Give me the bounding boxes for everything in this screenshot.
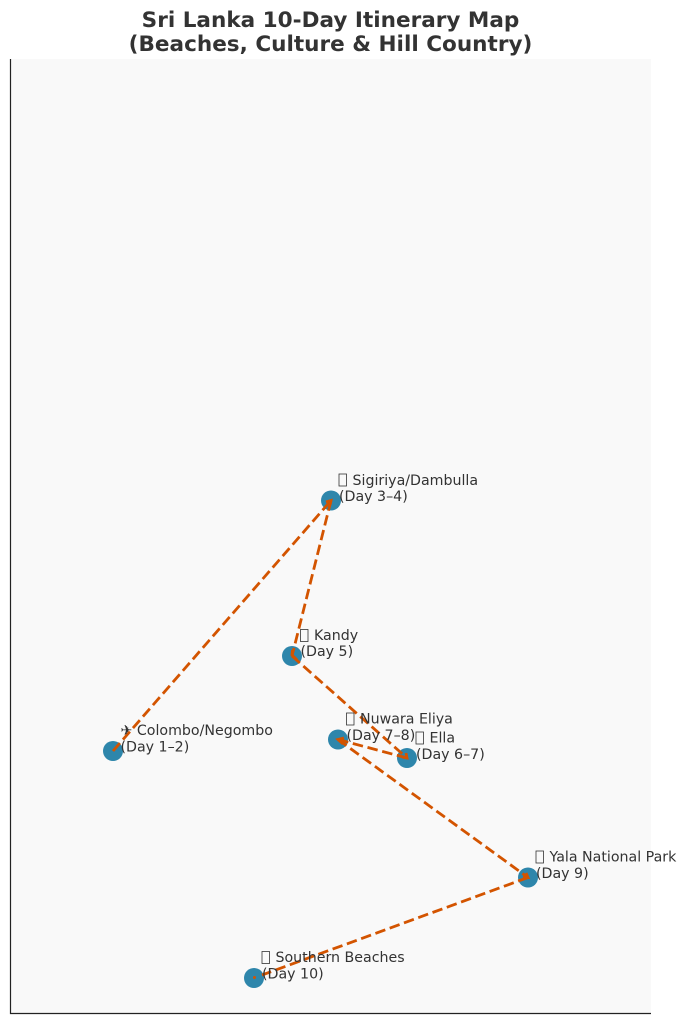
label: Yala National Park [536, 850, 677, 882]
label: Nuwara Eliya: Nuwara Eliya [360, 712, 453, 728]
title: (Beaches, Culture & Hill Country) [129, 32, 532, 57]
route arrow: Colombo to Sigiriya [113, 500, 331, 751]
label: Ella [416, 730, 485, 763]
label: Kandy [300, 628, 358, 660]
label: Colombo/Negombo: (Day 1–2) [120, 740, 189, 756]
label: Ella: Ella [430, 730, 455, 746]
label: Southern Beaches: Southern Beaches [276, 950, 405, 966]
label: Yala National Park: (Day 9) [536, 866, 589, 882]
route arrow: Kandy to Ella [292, 656, 407, 758]
route arrow: Yala to Southern Beaches [253, 878, 528, 979]
label: Southern Beaches [262, 950, 405, 982]
title [129, 8, 532, 57]
label: Ella: (Day 6–7) [416, 747, 485, 763]
label: Sigiriya/Dambulla: Sigiriya/Dambulla [352, 473, 478, 489]
route arrow: Sigiriya to Kandy [292, 500, 331, 660]
label: Nuwara Eliya [346, 712, 453, 744]
label: Nuwara Eliya: (Day 7–8) [346, 728, 415, 744]
label: Kandy: Kandy [314, 628, 358, 644]
label: Colombo/Negombo [120, 723, 273, 756]
label: Sigiriya/Dambulla [339, 473, 478, 505]
label: Kandy: (Day 5) [300, 644, 353, 660]
label: Sigiriya/Dambulla: (Day 3–4) [339, 489, 408, 505]
route arrow: Nuwara Eliya to Yala [338, 740, 528, 878]
label: Colombo/Negombo: ✈ Colombo/Negombo [120, 723, 273, 739]
location markers [103, 490, 538, 988]
label: Yala National Park: Yala National Park [548, 850, 677, 866]
label: Southern Beaches: (Day 10) [262, 966, 324, 982]
title: Sri Lanka 10-Day Itinerary Map [142, 8, 519, 33]
route arrow: Ella to Nuwara Eliya [338, 738, 407, 758]
